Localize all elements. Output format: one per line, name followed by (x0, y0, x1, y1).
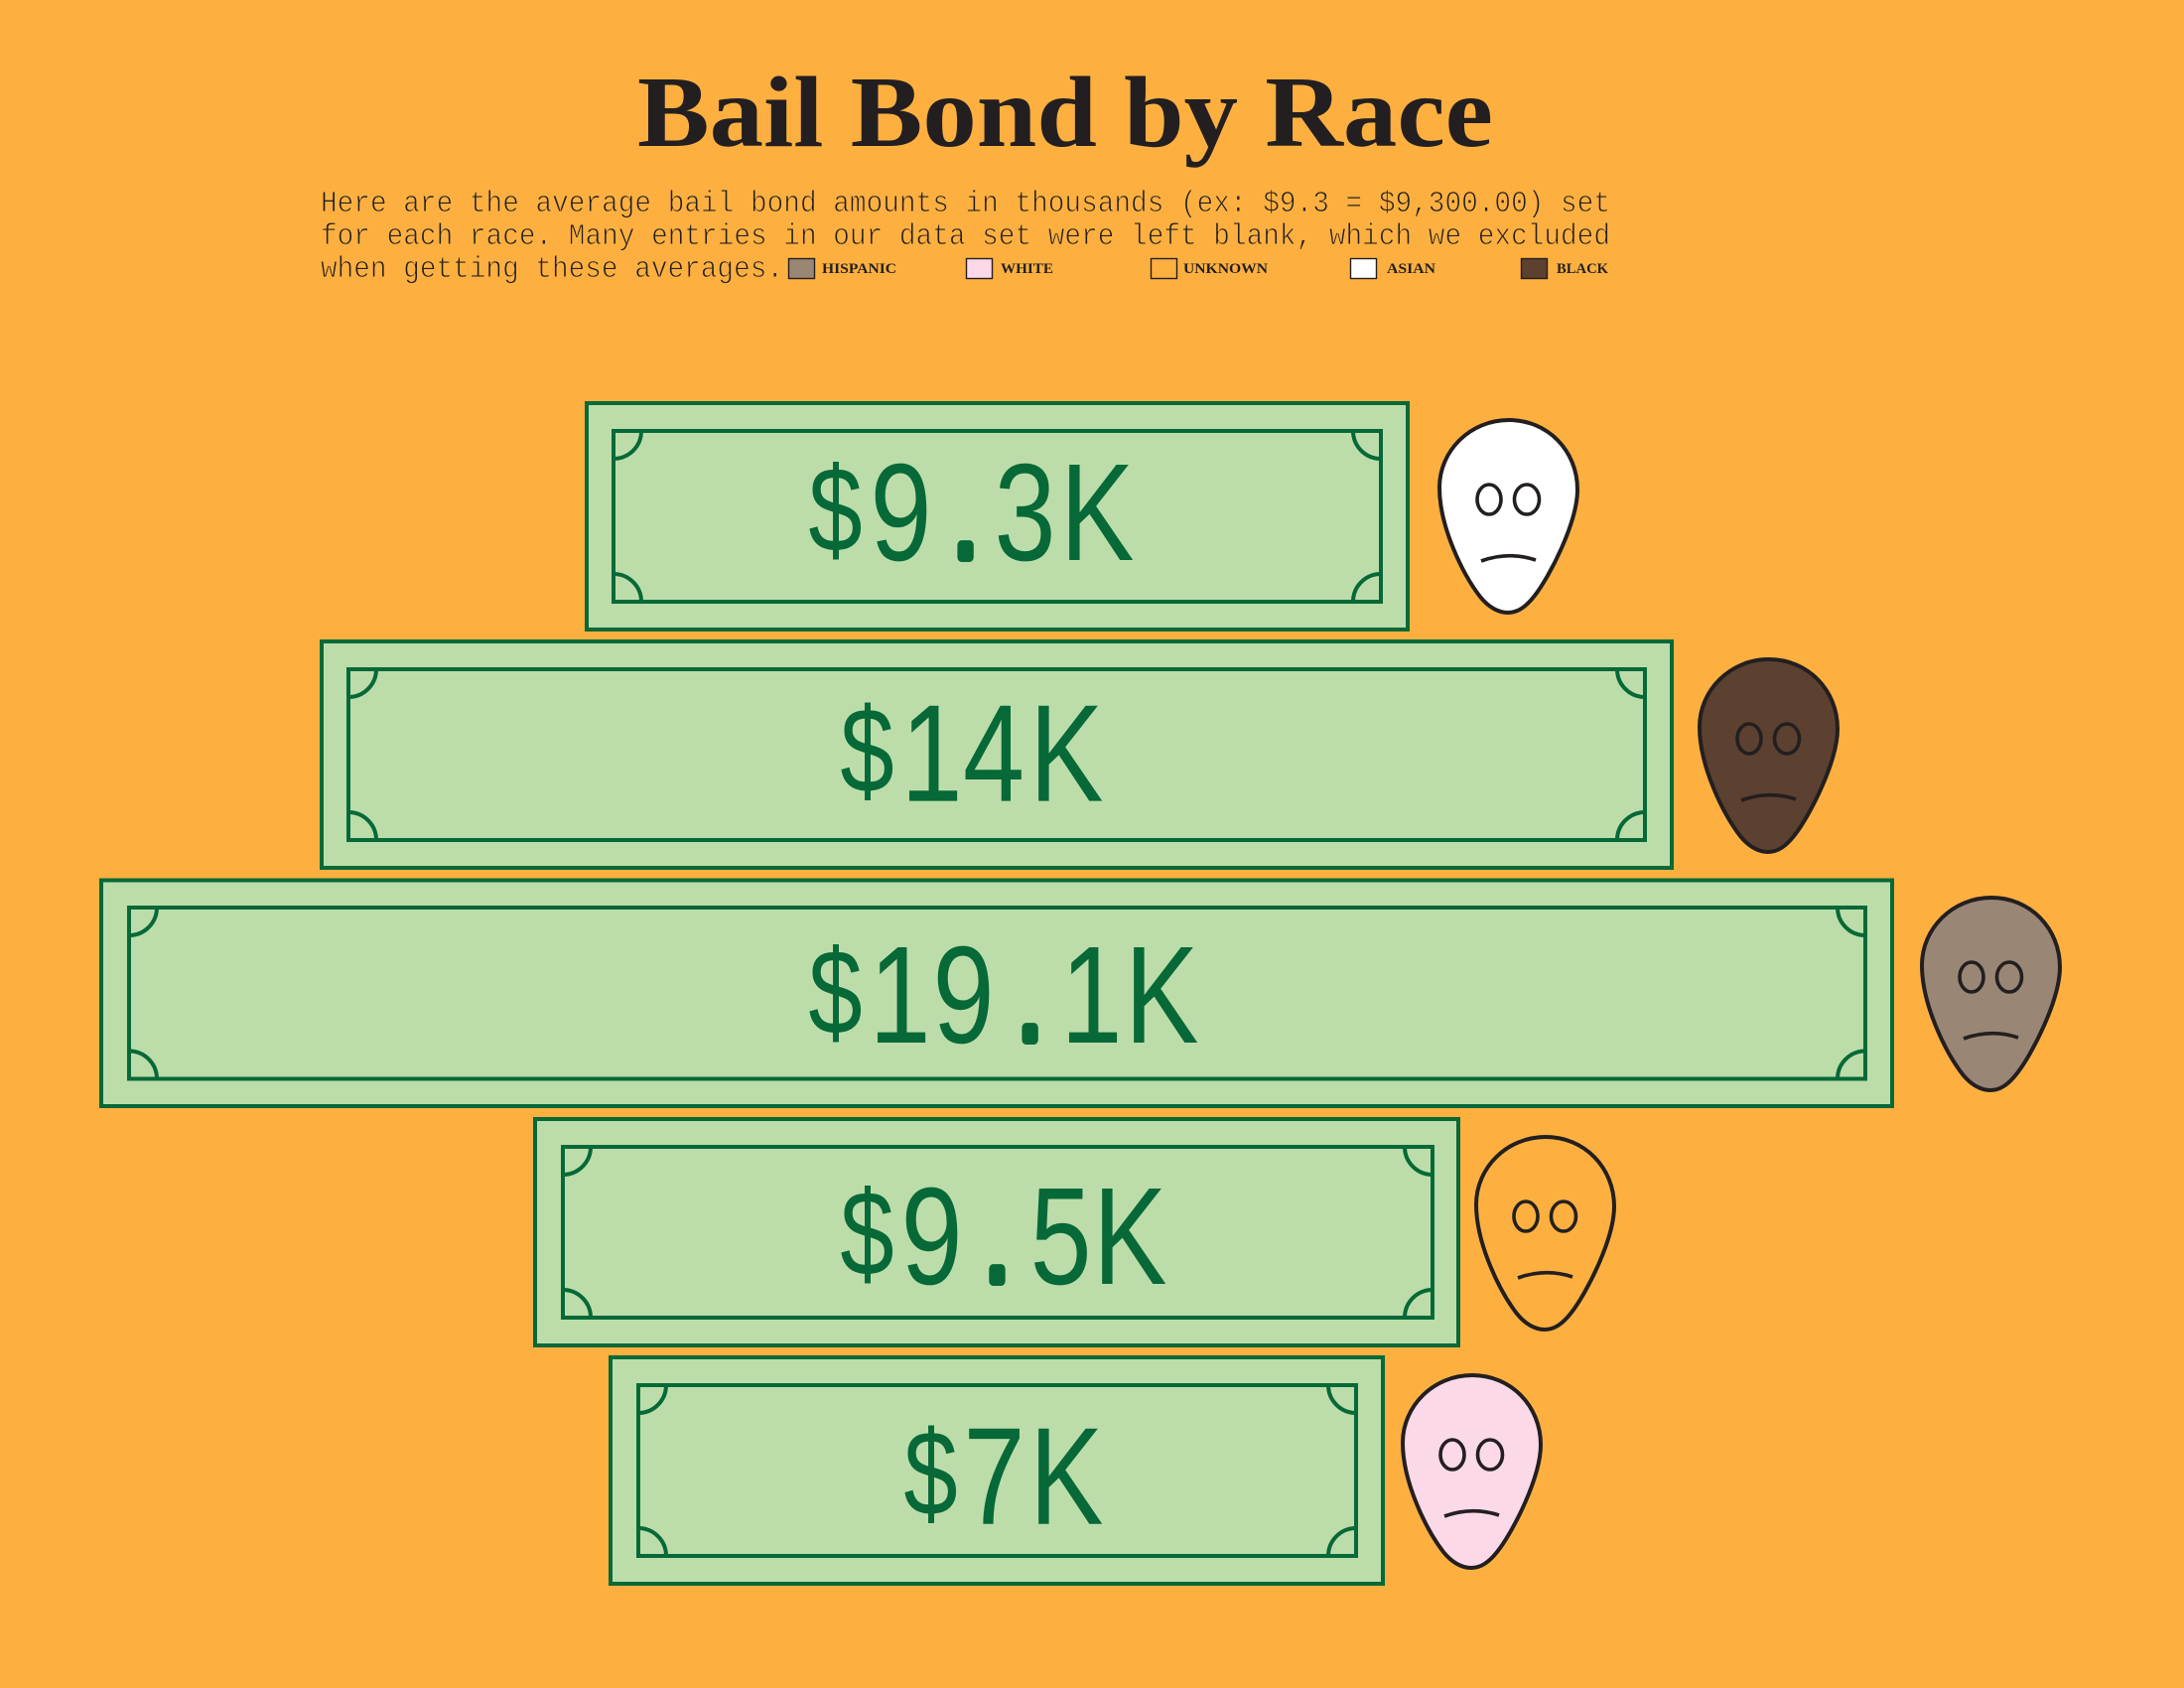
row: unknown (535, 1119, 1614, 1345)
bill: $9.3K: K (1060, 435, 1134, 590)
bill: $7K: K (1029, 1399, 1103, 1554)
bill: $9.3K: . (953, 460, 978, 581)
legend item: white: WHITE (1001, 261, 1053, 277)
legend item: unknown (1152, 258, 1268, 278)
legend item: asian (1350, 258, 1435, 278)
row: asian (587, 403, 1577, 630)
bill: $9.5K: . (985, 1184, 1010, 1305)
bill: $9.3K: 3 (995, 435, 1056, 590)
bill: $19.1K: . (1018, 942, 1042, 1063)
legend (788, 258, 1608, 278)
bill: $19.1K: 9 (933, 917, 995, 1072)
bill: $9.3K: 9 (870, 435, 932, 590)
face: unknown (1476, 1137, 1614, 1330)
description text (321, 188, 1610, 287)
bill: $9.5K: 9 (901, 1159, 963, 1314)
bill: $19.1K (101, 880, 1892, 1106)
bill: $14K (322, 641, 1672, 868)
legend item: hispanic (788, 258, 896, 278)
description text: when getting these averages. (321, 253, 783, 287)
bill: $7K: $ (903, 1406, 958, 1541)
bill: $14K: 1 (901, 676, 963, 831)
face: black (1700, 659, 1838, 852)
bill: $14K: K (1029, 676, 1103, 831)
bill: $14K: $ (840, 683, 894, 818)
bill: $9.5K: 5 (1030, 1159, 1092, 1314)
legend item: black (1521, 258, 1608, 278)
bill: $9.3K (587, 403, 1408, 630)
legend item: asian: ASIAN (1387, 261, 1435, 277)
bill: $19.1K: 1 (1060, 917, 1123, 1072)
face: asian (1439, 420, 1577, 613)
bill: $9.5K: $ (840, 1167, 894, 1302)
bill: $9.5K: K (1093, 1159, 1166, 1314)
face: white (1403, 1375, 1541, 1568)
row: hispanic (101, 880, 2060, 1106)
bill: $19.1K: K (1125, 917, 1198, 1072)
row: white (611, 1357, 1541, 1584)
bill: $9.3K: $ (808, 443, 863, 578)
bill: $19.1K: 1 (870, 917, 931, 1072)
legend item: white (967, 258, 1053, 278)
bill: $14K: 4 (963, 676, 1024, 831)
bill: $7K (611, 1357, 1383, 1584)
description text: Here are the average bail bond amounts in thousands (ex: $9.3 = $9,300.00) set (321, 188, 1610, 221)
face: hispanic (1922, 898, 2060, 1090)
title: Bail Bond by Race (637, 57, 1493, 169)
description text: for each race. Many entries in our data set were left blank, which we excluded (321, 220, 1610, 254)
legend item: hispanic: HISPANIC (822, 261, 896, 277)
bill: $7K: 7 (963, 1399, 1025, 1554)
bill: $9.5K (535, 1119, 1458, 1345)
bill: $19.1K: $ (808, 925, 863, 1060)
legend item: black: BLACK (1557, 261, 1608, 277)
legend item: unknown: UNKNOWN (1183, 261, 1268, 277)
row: black (322, 641, 1838, 868)
